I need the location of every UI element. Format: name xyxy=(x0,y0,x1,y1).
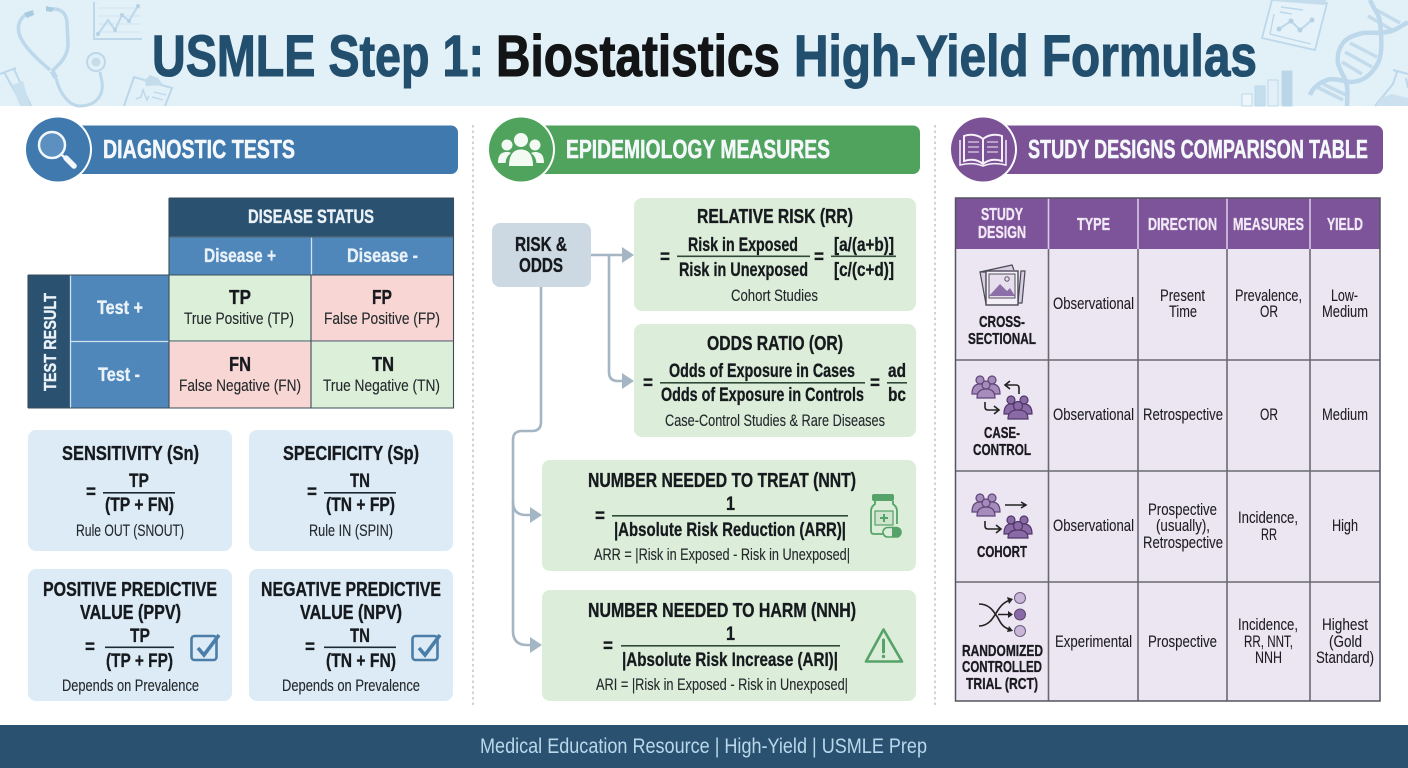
row: cohort: COHORT xyxy=(977,544,1027,561)
card: odds ratio: bc xyxy=(888,384,906,406)
card: number needed to treat: = xyxy=(595,505,605,527)
card: sensitivity xyxy=(28,430,232,551)
icon: report with chart xyxy=(1262,0,1327,50)
row: case-control: Medium xyxy=(1322,405,1368,424)
box: risk and odds: ODDS xyxy=(519,254,563,277)
row: cross-sectional: Time xyxy=(1169,302,1197,321)
card: negative predictive value: (TN + FN) xyxy=(326,650,396,672)
box: risk and odds xyxy=(492,223,591,287)
footer banner: Medical Education Resource | High-Yield | USMLE Prep xyxy=(480,734,927,758)
row: cohort: Incidence, xyxy=(1238,508,1298,527)
card: negative predictive value: VALUE (NPV) xyxy=(300,601,402,624)
icon: checkbox xyxy=(192,635,219,660)
card: relative risk: RELATIVE RISK (RR) xyxy=(697,205,853,228)
card: odds ratio: ODDS RATIO (OR) xyxy=(707,332,843,355)
row: cross-sectional xyxy=(968,265,1368,348)
card: odds ratio: Odds of Exposure in Cases xyxy=(669,360,855,382)
table header row: YIELD xyxy=(1327,214,1363,234)
row: cohort: Observational xyxy=(1053,516,1134,535)
card: number needed to treat: |Absolute Risk Reduction (ARR)| xyxy=(614,519,846,541)
card: sensitivity: TP xyxy=(129,470,149,492)
row: randomized controlled trial: NNH xyxy=(1255,648,1282,667)
card: positive predictive value: POSITIVE PREDICTIVE xyxy=(43,578,217,601)
icon: clipboard xyxy=(124,75,172,106)
row: cohort: High xyxy=(1332,516,1358,535)
row: cross-sectional: Medium xyxy=(1322,302,1368,321)
card: number needed to harm xyxy=(542,590,916,701)
card: negative predictive value: = xyxy=(305,636,315,658)
box: risk and odds: RISK & xyxy=(515,233,567,256)
card: odds ratio xyxy=(634,324,916,437)
row: cross-sectional: Present xyxy=(1160,286,1205,305)
row: cross-sectional: CROSS- xyxy=(979,314,1025,331)
card: positive predictive value: = xyxy=(85,636,95,658)
confusion matrix: Test - xyxy=(98,364,140,386)
card: relative risk: Risk in Unexposed xyxy=(679,259,808,281)
card: relative risk: = xyxy=(660,246,670,268)
row: randomized controlled trial: (Gold xyxy=(1329,632,1362,651)
card: negative predictive value xyxy=(249,569,453,701)
confusion matrix: False Positive (FP) xyxy=(324,310,440,328)
row: case-control: CASE- xyxy=(984,425,1020,442)
comparison table xyxy=(955,198,1380,701)
card: negative predictive value: Depends on Prevalence xyxy=(282,677,420,695)
icon: retrospective groups xyxy=(972,376,1032,419)
icon: stacked photos xyxy=(980,265,1025,305)
card: relative risk: [c/(c+d)] xyxy=(834,259,894,281)
card: odds ratio: ad xyxy=(888,360,906,382)
card: relative risk: Risk in Exposed xyxy=(688,234,798,256)
panel: diagnostic tests xyxy=(24,116,458,701)
confusion matrix: TP xyxy=(229,286,251,309)
icon: checkbox xyxy=(412,635,440,660)
footer banner xyxy=(0,725,1408,768)
card: negative predictive value: NEGATIVE PREDICTIVE xyxy=(261,578,441,601)
icon: flask xyxy=(1375,70,1408,106)
confusion matrix: Test + xyxy=(97,297,143,319)
card: sensitivity: SENSITIVITY (Sn) xyxy=(62,442,199,465)
section header: epidemiology measures xyxy=(487,116,920,184)
card: number needed to harm: |Absolute Risk Increase (ARI)| xyxy=(622,649,838,671)
icon: DNA helix xyxy=(1310,0,1408,106)
card: positive predictive value xyxy=(28,569,232,701)
section header: diagnostic tests: DIAGNOSTIC TESTS xyxy=(103,136,295,164)
panel: epidemiology measures xyxy=(487,116,920,701)
table header row: STUDY xyxy=(981,204,1023,224)
row: randomized controlled trial: CONTROLLED xyxy=(962,659,1042,676)
card: sensitivity: Rule OUT (SNOUT) xyxy=(76,522,184,540)
confusion matrix: DISEASE STATUS xyxy=(248,206,374,228)
card: positive predictive value: (TP + FP) xyxy=(106,650,173,672)
section header: epidemiology measures: EPIDEMIOLOGY MEASURES xyxy=(566,136,830,164)
icon: magnifying glass xyxy=(39,132,74,166)
confusion matrix: FP xyxy=(372,286,392,309)
icon: bar chart xyxy=(1242,71,1292,106)
title: USMLE Step 1: xyxy=(152,24,484,89)
row: cross-sectional: Low- xyxy=(1331,286,1358,305)
row: randomized controlled trial: Prospective xyxy=(1148,632,1217,651)
row: cohort: (usually), xyxy=(1156,516,1210,535)
table header row: TYPE xyxy=(1077,214,1110,234)
card: relative risk xyxy=(634,198,916,311)
row: case-control: Observational xyxy=(1053,405,1134,424)
card: odds ratio: = xyxy=(643,372,653,394)
card: negative predictive value: TN xyxy=(350,625,370,647)
icon: group of people xyxy=(498,133,544,166)
row: randomized controlled trial: Highest xyxy=(1322,615,1368,634)
row: randomized controlled trial: Experimental xyxy=(1055,632,1132,651)
card: number needed to treat: NUMBER NEEDED TO TREAT (NNT) xyxy=(588,469,856,492)
table header row xyxy=(978,204,1363,242)
card: sensitivity: (TP + FN) xyxy=(105,494,174,516)
confusion matrix: Disease + xyxy=(204,245,276,267)
row: randomized controlled trial: RR, NNT, xyxy=(1244,632,1293,651)
confusion matrix: Disease - xyxy=(347,245,418,267)
row: cohort xyxy=(972,494,1358,561)
row: case-control: CONTROL xyxy=(973,442,1031,459)
title: High-Yield Formulas xyxy=(794,24,1257,89)
icon: stethoscope xyxy=(18,6,105,106)
card: positive predictive value: VALUE (PPV) xyxy=(80,601,181,624)
card: number needed to harm: 1 xyxy=(726,623,735,645)
card: odds ratio: Case-Control Studies & Rare Diseases xyxy=(665,412,885,430)
row: cohort: RR xyxy=(1261,525,1277,544)
icon: warning triangle xyxy=(866,630,902,662)
confusion matrix: True Positive (TP) xyxy=(184,310,294,328)
card: specificity xyxy=(249,430,453,551)
confusion matrix: False Negative (FN) xyxy=(179,377,301,395)
icon: test tube xyxy=(0,68,31,106)
card: number needed to harm: NUMBER NEEDED TO HARM (NNH) xyxy=(588,599,856,622)
card: odds ratio: = xyxy=(870,372,880,394)
card: specificity: (TN + FP) xyxy=(326,494,395,516)
card: relative risk: = xyxy=(814,246,824,268)
row: case-control xyxy=(972,376,1368,459)
row: randomized controlled trial: Incidence, xyxy=(1238,615,1298,634)
confusion matrix: TEST RESULT xyxy=(40,293,60,391)
card: number needed to treat: 1 xyxy=(726,493,735,515)
icon: prospective groups xyxy=(972,494,1032,538)
arrows: connectors xyxy=(513,247,634,653)
row: cross-sectional: Prevalence, xyxy=(1235,286,1302,305)
section header: study designs xyxy=(949,116,1383,184)
confusion matrix xyxy=(28,198,454,408)
row: randomized controlled trial xyxy=(962,592,1374,693)
icon: open book xyxy=(960,135,1006,166)
row: case-control: OR xyxy=(1260,405,1278,424)
card: number needed to harm: = xyxy=(603,635,613,657)
panel: study designs comparison table xyxy=(949,116,1383,701)
table header row: MEASURES xyxy=(1233,214,1304,234)
row: cross-sectional: OR xyxy=(1260,302,1278,321)
row: cross-sectional: Observational xyxy=(1053,294,1134,313)
table header row: DESIGN xyxy=(978,222,1026,242)
row: randomized controlled trial: RANDOMIZED xyxy=(962,643,1043,660)
card: odds ratio: Odds of Exposure in Controls xyxy=(661,384,864,406)
card: specificity: SPECIFICITY (Sp) xyxy=(283,442,419,465)
confusion matrix: FN xyxy=(229,353,251,376)
card: number needed to treat xyxy=(542,460,916,571)
card: number needed to treat: ARR = |Risk in Exposed - Risk in Unexposed| xyxy=(594,546,850,564)
title xyxy=(152,24,1257,89)
row: cohort: Prospective xyxy=(1148,500,1217,519)
icon: randomization diagram xyxy=(979,592,1026,636)
icon: medicine bottle xyxy=(871,494,901,537)
card: relative risk: [a/(a+b)] xyxy=(834,234,894,256)
confusion matrix: True Negative (TN) xyxy=(323,377,440,395)
title: Biostatistics xyxy=(496,24,780,89)
card: specificity: = xyxy=(307,481,317,503)
card: specificity: Rule IN (SPIN) xyxy=(309,522,393,540)
row: case-control: Retrospective xyxy=(1143,405,1223,424)
section header: diagnostic tests xyxy=(24,116,458,184)
icon: line chart xyxy=(94,2,142,39)
confusion matrix: TN xyxy=(372,353,394,376)
row: cohort: Retrospective xyxy=(1143,533,1223,552)
row: randomized controlled trial: TRIAL (RCT) xyxy=(966,676,1038,693)
row: randomized controlled trial: Standard) xyxy=(1316,648,1374,667)
header banner xyxy=(0,0,1408,106)
card: positive predictive value: TP xyxy=(130,625,150,647)
card: specificity: TN xyxy=(350,470,370,492)
table header row: DIRECTION xyxy=(1148,214,1217,234)
card: sensitivity: = xyxy=(86,481,96,503)
row: cross-sectional: SECTIONAL xyxy=(968,331,1036,348)
card: relative risk: Cohort Studies xyxy=(731,287,818,305)
card: number needed to harm: ARI = |Risk in Exposed - Risk in Unexposed| xyxy=(596,676,848,694)
card: positive predictive value: Depends on Prevalence xyxy=(62,677,199,695)
